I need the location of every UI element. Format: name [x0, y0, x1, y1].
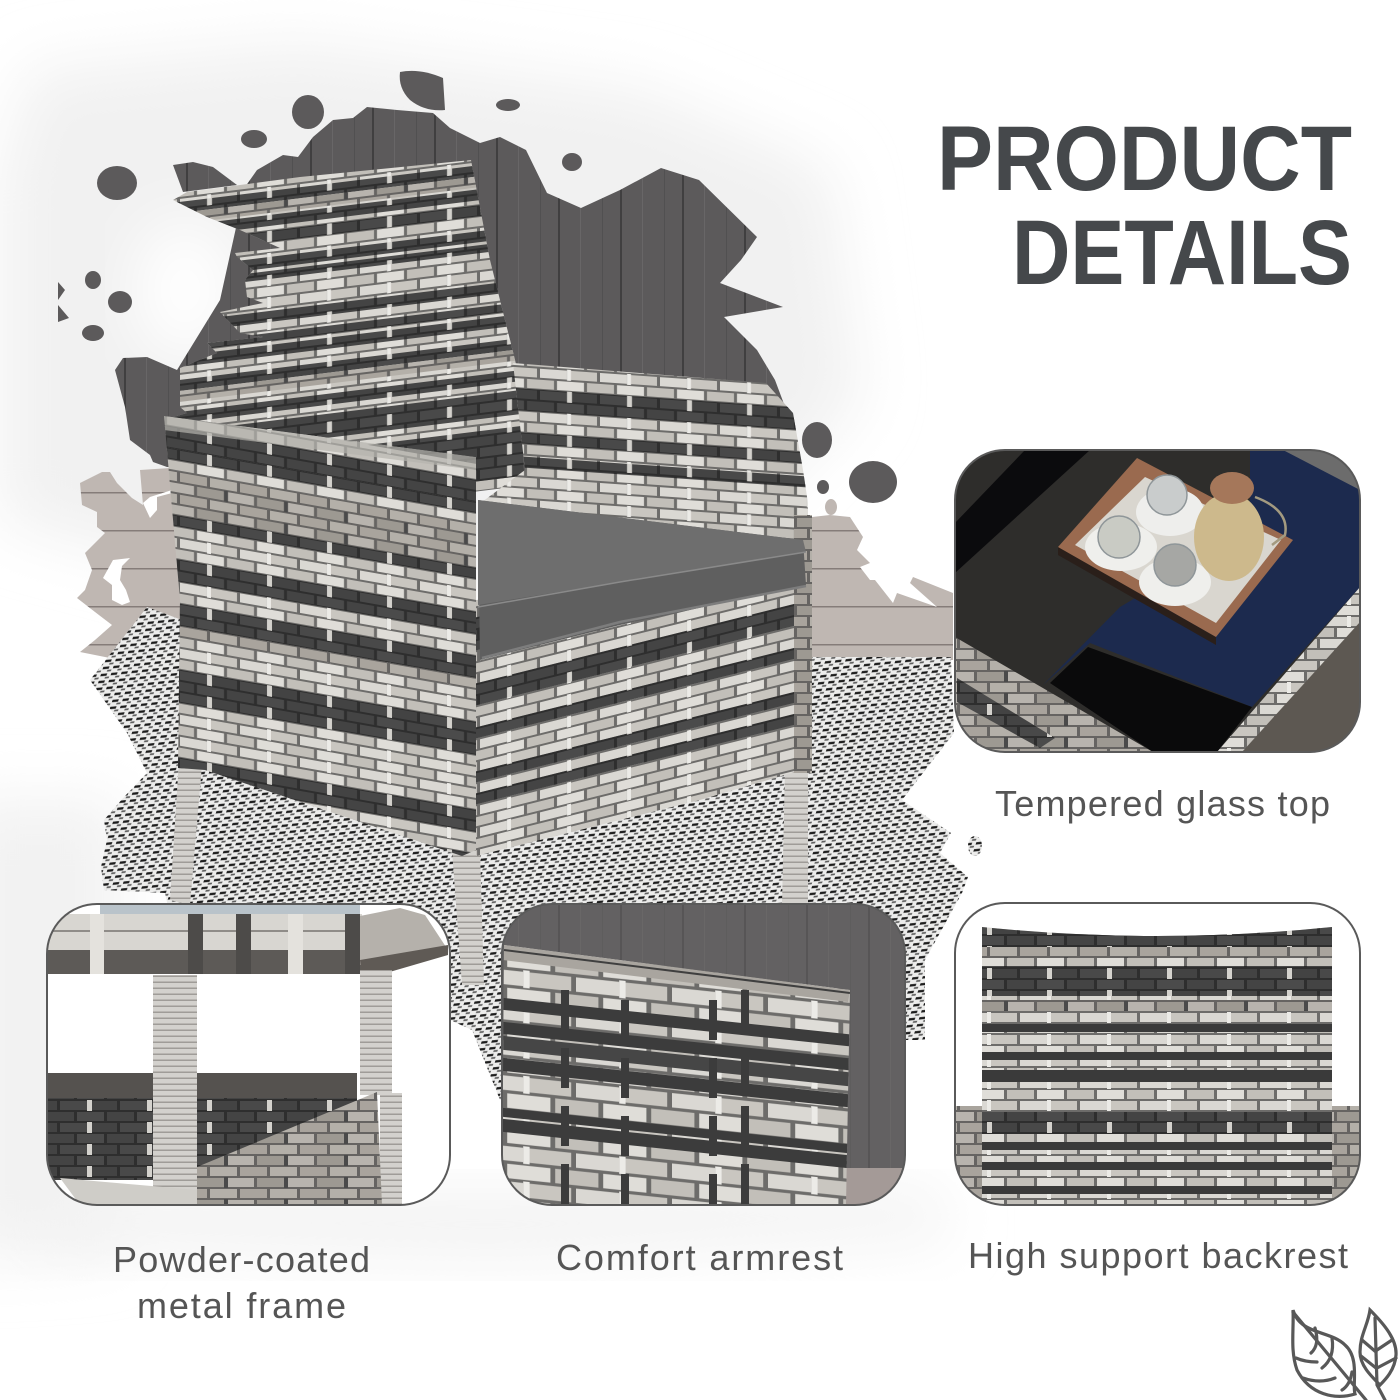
chair front panel	[164, 416, 476, 856]
label: tempered glass top: Tempered glass top	[995, 783, 1330, 824]
panel: tempered glass top	[955, 450, 1360, 752]
chair far armrest	[484, 363, 808, 539]
panel: comfort armrest	[501, 903, 906, 1206]
wooden floor splash	[77, 468, 953, 660]
chair side panel	[476, 590, 794, 856]
title: PRODUCT	[937, 108, 1352, 210]
label: powder-coated metal frame: metal frame	[137, 1285, 346, 1326]
seat cushion	[478, 500, 806, 660]
rug	[90, 607, 982, 1100]
chair	[160, 124, 815, 985]
label: comfort armrest: Comfort armrest	[556, 1237, 843, 1278]
dark wood splash	[58, 71, 897, 503]
icon: leaves	[1293, 1310, 1396, 1400]
chair front post	[794, 515, 812, 773]
chair legs	[170, 760, 808, 985]
panel: metal frame	[47, 904, 450, 1205]
title: DETAILS	[1012, 202, 1352, 304]
label: powder-coated metal frame	[113, 1239, 370, 1326]
label: high support backrest: High support backrest	[968, 1235, 1348, 1276]
tray with glasses and jug	[1058, 458, 1293, 645]
panel: high support backrest	[955, 903, 1360, 1205]
label: powder-coated metal frame: Powder-coated	[113, 1239, 370, 1280]
title	[937, 108, 1352, 304]
paint droplets	[58, 71, 897, 503]
chair backrest	[173, 160, 524, 492]
